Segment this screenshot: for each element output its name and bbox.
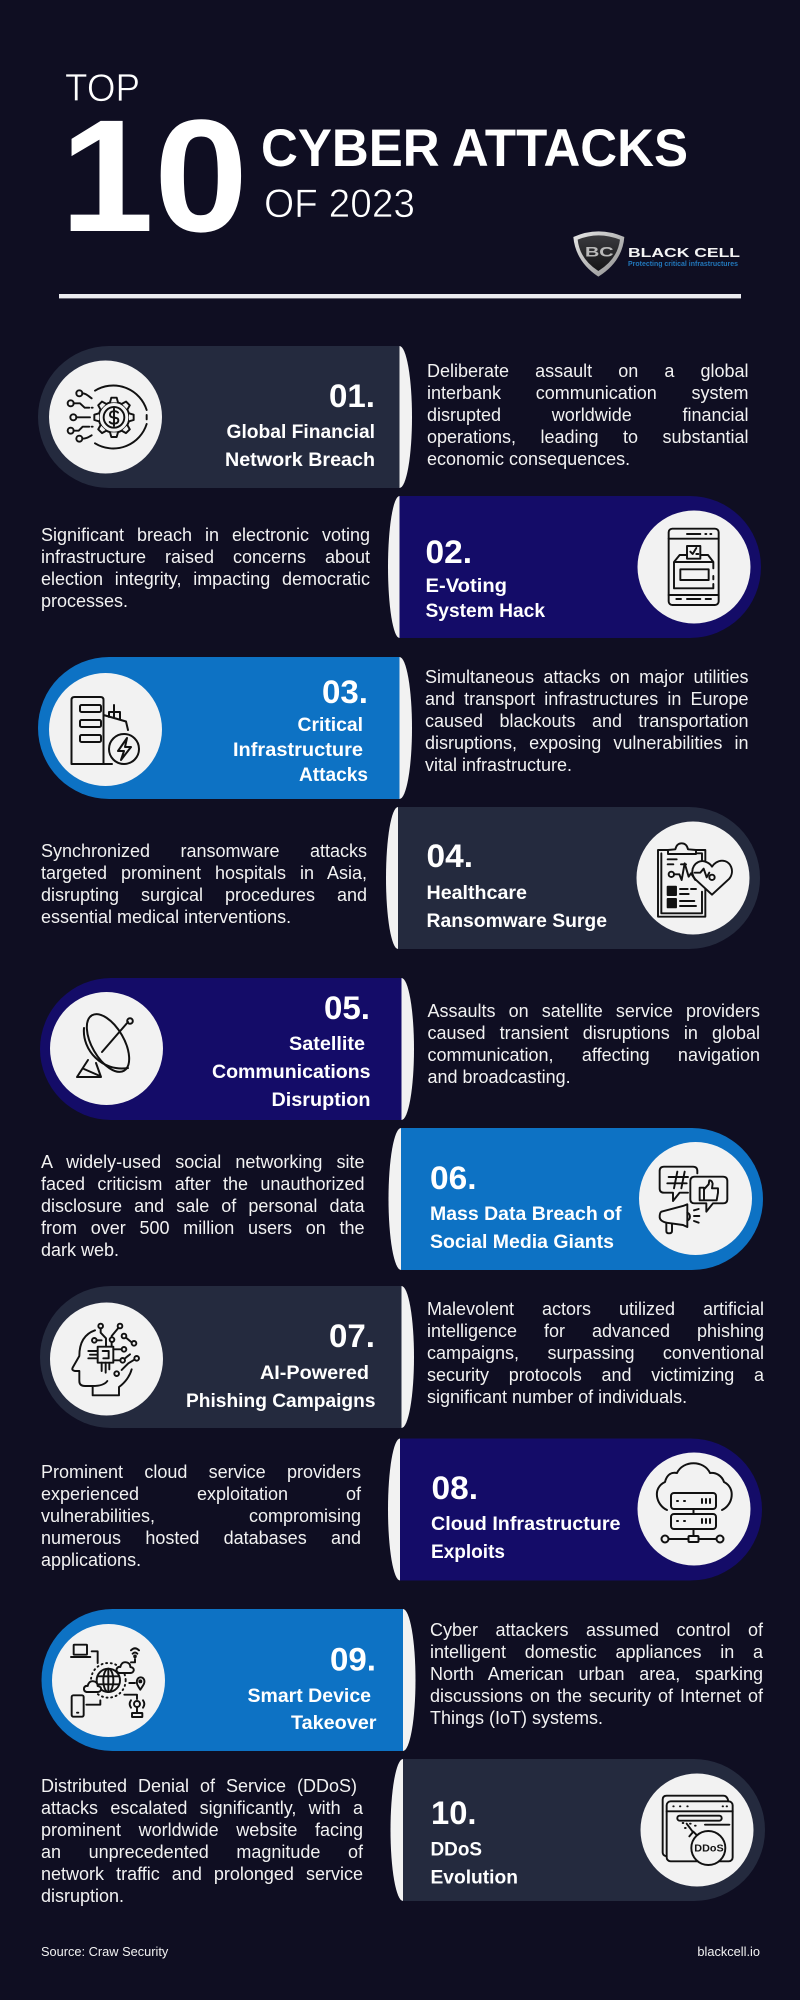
text block 07: campaigns, surpassing conventional xyxy=(427,1343,764,1363)
text block 10: Distributed Denial of Service (DDoS) xyxy=(41,1776,357,1796)
text block 06: A widely-used social networking site xyxy=(41,1152,364,1172)
text block 04: essential medical interventions. xyxy=(41,907,291,927)
heading: Ransomware Surge xyxy=(426,911,607,932)
text block 10: prominent worldwide website facing xyxy=(41,1820,363,1840)
heading: E-Voting xyxy=(426,576,507,597)
card 03: Critical Infrastructure Attacks xyxy=(38,657,412,799)
heading: Takeover xyxy=(291,1713,377,1734)
title: 10 xyxy=(60,86,248,265)
text block 08: applications. xyxy=(41,1550,141,1570)
heading: Critical xyxy=(298,715,363,736)
number 09: 09. xyxy=(330,1642,376,1678)
heading xyxy=(426,576,545,622)
text block 08 xyxy=(41,1462,362,1570)
text block 02: Significant breach in electronic voting xyxy=(41,525,370,545)
icon: satellite dish xyxy=(77,1007,138,1079)
icon: financial gear xyxy=(68,386,147,448)
source note: Source: Craw Security xyxy=(41,1944,168,1959)
heading xyxy=(212,1034,370,1111)
card 08: Cloud Infrastructure Exploits xyxy=(388,1438,762,1580)
logo: Black Cell xyxy=(573,231,740,277)
icon: medical clipboard xyxy=(658,843,732,917)
text block 06: from over 500 million users on the xyxy=(41,1218,364,1238)
heading xyxy=(225,422,375,471)
card 10: DDoS Evolution xyxy=(390,1759,765,1901)
heading: Exploits xyxy=(431,1542,505,1563)
text block 05: Assaults on satellite service providers xyxy=(428,1001,760,1021)
text block 01: economic consequences. xyxy=(427,449,630,469)
text block 09: discussions on the security of Internet of xyxy=(430,1686,763,1706)
heading: Smart Device xyxy=(248,1686,371,1707)
text block 05 xyxy=(428,1001,760,1087)
title: CYBER ATTACKS xyxy=(261,119,688,178)
heading: Evolution xyxy=(430,1868,518,1888)
title: OF 2023 xyxy=(264,182,415,226)
text block 10: network traffic and prolonged service xyxy=(41,1864,363,1884)
card 02: E-Voting System Hack xyxy=(388,496,761,638)
icon: DDoS bomb xyxy=(663,1796,733,1865)
text block 03: vital infrastructure. xyxy=(425,755,572,775)
card 01: Global Financial Network Breach xyxy=(38,346,412,488)
text block 01: operations, leading to substantial xyxy=(427,427,748,447)
number 04: 04. xyxy=(426,838,473,874)
text block 03: caused blackouts and transportation xyxy=(425,711,748,731)
text block 01 xyxy=(427,361,748,469)
heading: Global Financial xyxy=(226,422,375,443)
logo: Black Cell: Protecting critical infrastructures xyxy=(628,259,738,268)
heading xyxy=(431,1514,620,1563)
logo: Black Cell: BLACK CELL xyxy=(628,245,740,260)
heading: AI-Powered xyxy=(260,1363,369,1384)
text block 10 xyxy=(41,1776,364,1906)
card 09: Smart Device Takeover xyxy=(41,1609,415,1751)
card 04: Healthcare Ransomware Surge xyxy=(386,807,760,949)
text block 08: Prominent cloud service providers xyxy=(41,1462,361,1482)
icon: AI head xyxy=(72,1324,139,1395)
text block 04 xyxy=(41,841,367,927)
number 06: 06. xyxy=(430,1160,476,1196)
text block 09: Cyber attackers assumed control of xyxy=(430,1620,763,1640)
text block 10: attacks escalated significantly, with a xyxy=(41,1798,363,1818)
text block 02: processes. xyxy=(41,591,128,611)
text block 01: disrupted worldwide financial xyxy=(427,405,748,425)
card 07: AI-Powered Phishing Campaigns xyxy=(40,1286,414,1428)
text block 05: communication, affecting navigation xyxy=(428,1045,760,1065)
text block 01: interbank communication system xyxy=(427,383,748,403)
icon: connected devices xyxy=(71,1645,144,1717)
heading xyxy=(248,1686,377,1734)
text block 08: numerous hosted databases and xyxy=(41,1528,361,1548)
heading: Network Breach xyxy=(225,450,375,471)
text block 09: North American urban area, sparking xyxy=(430,1664,763,1684)
card 05: Satellite Communications Disruption xyxy=(40,978,414,1120)
heading xyxy=(426,883,607,932)
heading xyxy=(186,1363,376,1412)
heading: Attacks xyxy=(299,765,368,786)
logo: Black Cell: BC xyxy=(585,244,614,260)
heading: System Hack xyxy=(426,601,545,622)
heading: Social Media Giants xyxy=(430,1232,614,1253)
text block 02: election integrity, impacting democratic xyxy=(41,569,370,589)
number 03: 03. xyxy=(322,674,368,710)
heading: Disruption xyxy=(272,1090,370,1111)
text block 03: disruptions, exposing vulnerabilities in xyxy=(425,733,748,753)
heading: Mass Data Breach of xyxy=(430,1204,622,1225)
text block 09: Things (IoT) systems. xyxy=(430,1708,603,1728)
title xyxy=(60,67,688,265)
text block 03 xyxy=(425,667,748,775)
heading: Cloud Infrastructure xyxy=(431,1514,620,1535)
heading: Healthcare xyxy=(426,883,527,904)
icon: voting phone xyxy=(669,529,719,605)
text block 02 xyxy=(41,525,370,611)
text block 06: disclosure and sale of personal data xyxy=(41,1196,364,1216)
icon: cloud servers xyxy=(657,1463,732,1542)
number 05: 05. xyxy=(324,990,370,1026)
text block 07 xyxy=(427,1299,764,1407)
heading xyxy=(430,1840,518,1888)
text block 04: disrupting surgical procedures and xyxy=(41,885,367,905)
text block 06: dark web. xyxy=(41,1240,119,1260)
website: blackcell.io xyxy=(697,1944,760,1959)
heading: DDoS xyxy=(430,1840,482,1860)
heading xyxy=(430,1204,622,1253)
text block 08: experienced exploitation of xyxy=(41,1484,361,1504)
text block 03: Simultaneous attacks on major utilities xyxy=(425,667,748,687)
text block 07: security protocols and victimizing a xyxy=(427,1365,764,1385)
icon: social media bubbles xyxy=(660,1167,727,1233)
text block 06 xyxy=(41,1152,364,1260)
icon: infrastructure power xyxy=(72,697,139,764)
title: TOP xyxy=(65,67,140,110)
text block 07: intelligence for advanced phishing xyxy=(427,1321,764,1341)
heading xyxy=(233,715,368,786)
text block 04: targeted prominent hospitals in Asia, xyxy=(41,863,367,883)
text block 09 xyxy=(430,1620,764,1728)
text block 05: and broadcasting. xyxy=(428,1067,571,1087)
text block 10: disruption. xyxy=(41,1886,124,1906)
text block 06: faced criticism after the unauthorized xyxy=(41,1174,364,1194)
heading: Communications xyxy=(212,1062,370,1083)
heading: Phishing Campaigns xyxy=(186,1391,376,1412)
number 07: 07. xyxy=(329,1318,375,1354)
text block 08: vulnerabilities, compromising xyxy=(41,1506,361,1526)
heading: Satellite xyxy=(289,1034,365,1055)
number 10: 10. xyxy=(431,1795,476,1831)
text block 01: Deliberate assault on a global xyxy=(427,361,748,381)
text block 02: infrastructure raised concerns about xyxy=(41,547,370,567)
number 02: 02. xyxy=(426,534,472,570)
number 08: 08. xyxy=(432,1470,478,1506)
text block 04: Synchronized ransomware attacks xyxy=(41,841,367,861)
text block 07: Malevolent actors utilized artificial xyxy=(427,1299,764,1319)
text block 10: an unprecedented magnitude of xyxy=(41,1842,363,1862)
text block 07: significant number of individuals. xyxy=(427,1387,687,1407)
text block 03: and transport infrastructures in Europe xyxy=(425,689,748,709)
icon: DDoS bomb: DDoS xyxy=(694,1844,724,1855)
heading: Infrastructure xyxy=(233,740,363,761)
text block 05: caused transient disruptions in global xyxy=(428,1023,760,1043)
card 06: Mass Data Breach of Social Media Giants xyxy=(388,1128,763,1270)
number 01: 01. xyxy=(329,378,375,414)
text block 09: intelligent domestic appliances in a xyxy=(430,1642,763,1662)
